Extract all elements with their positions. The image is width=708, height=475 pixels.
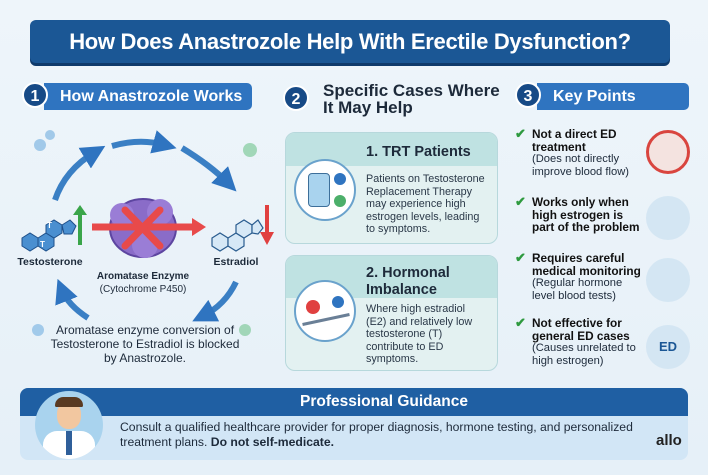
card: TRT patients: estrogen levels, leading [366, 210, 479, 222]
panel: professional guidance: allo [656, 432, 682, 449]
icon: testosterone molecule [22, 220, 76, 251]
diagram: anastrozole mechanism: (Cytochrome P450) [100, 284, 186, 295]
key point 2: Works only when high estrogen is part of the problem [532, 195, 640, 234]
icon: monitor [646, 258, 690, 302]
estradiol molecule [212, 220, 263, 251]
diagram: anastrozole mechanism: Aromatase enzyme conversion of [56, 323, 235, 337]
icon: doctor [35, 391, 103, 459]
arrows cycle [55, 142, 236, 318]
panel: professional guidance: Professional Guidance [300, 393, 468, 410]
card: hormonal imbalance: (E2) and relatively low [366, 316, 472, 328]
section 1 header: How Anastrozole Works [60, 88, 242, 105]
card: TRT patients: may experience high [366, 198, 466, 210]
key point 4 [515, 315, 636, 366]
diagram: anastrozole mechanism: Estradiol [214, 256, 259, 268]
key point 4: (Causes unrelated to high estrogen) [532, 342, 636, 366]
panel: professional guidance [20, 388, 688, 460]
section 2 header: Specific Cases Where [323, 81, 500, 100]
card: TRT patients [285, 132, 498, 244]
card: TRT patients: Replacement Therapy [366, 186, 472, 198]
title [30, 20, 670, 63]
panel: professional guidance: Consult a qualified healthcare provider for proper diagnosis, hormone testing, and personalized [120, 420, 633, 434]
icon: no pills [646, 130, 690, 174]
small molecules decor [32, 130, 257, 336]
section 3 header: Key Points [553, 88, 636, 105]
diagram: anastrozole mechanism [17, 130, 274, 365]
icon: ED symbol [646, 325, 690, 369]
card: TRT patients: Patients on Testosterone [366, 173, 485, 185]
card: hormonal imbalance [285, 255, 498, 371]
section 2 header: It May Help [323, 98, 413, 117]
diagram: anastrozole mechanism: T [40, 240, 45, 249]
card: hormonal imbalance: 2. Hormonal [366, 265, 450, 281]
key point 1: (Does not directly improve blood flow) [532, 153, 629, 178]
enzyme blob [92, 199, 206, 258]
title: How Does Anastrozole Help With Erectile Dysfunction? [69, 29, 631, 54]
icon: ED symbol: ED [659, 339, 677, 354]
icon: chart [646, 196, 690, 240]
card: TRT patients: to symptoms. [366, 223, 430, 235]
section 2 header: 2 [292, 91, 300, 108]
section 1 header: 1 [31, 88, 39, 105]
icon: vial [294, 159, 356, 221]
card: hormonal imbalance: symptoms. [366, 353, 418, 365]
card: hormonal imbalance: Imbalance [366, 282, 437, 298]
card: hormonal imbalance: testosterone (T) [366, 328, 442, 340]
key point 4: ✔ [515, 315, 526, 330]
diagram: anastrozole mechanism: by Anastrozole. [104, 351, 186, 365]
key point 1 [515, 126, 629, 178]
section 3 header: 3 [524, 88, 532, 105]
section 1 header [22, 82, 252, 110]
card: TRT patients: 1. TRT Patients [366, 144, 471, 160]
section 2 header [283, 81, 500, 117]
panel: professional guidance: treatment plans. Do not self-medicate. [120, 435, 334, 449]
key point 3 [515, 250, 641, 302]
diagram: anastrozole mechanism: T [47, 221, 52, 230]
key point 4: Not effective for general ED cases [532, 316, 630, 342]
section 3 header [515, 82, 689, 110]
card: hormonal imbalance: Where high estradiol [366, 303, 465, 315]
diagram: anastrozole mechanism: Testosterone [17, 256, 83, 268]
up arrow [73, 205, 87, 245]
key point 3: (Regular hormone level blood tests) [532, 277, 622, 302]
icon: balance [294, 280, 356, 342]
key point 1: Not a direct ED treatment [532, 127, 617, 154]
key point 2: ✔ [515, 194, 526, 209]
diagram: anastrozole mechanism: Aromatase Enzyme [97, 271, 190, 282]
key point 3: Requires careful medical monitoring [532, 251, 641, 278]
key point 1: ✔ [515, 126, 526, 141]
key point 3: ✔ [515, 250, 526, 265]
diagram: anastrozole mechanism: Testosterone to Estradiol is blocked [51, 337, 239, 351]
card: hormonal imbalance: contribute to ED [366, 340, 443, 352]
